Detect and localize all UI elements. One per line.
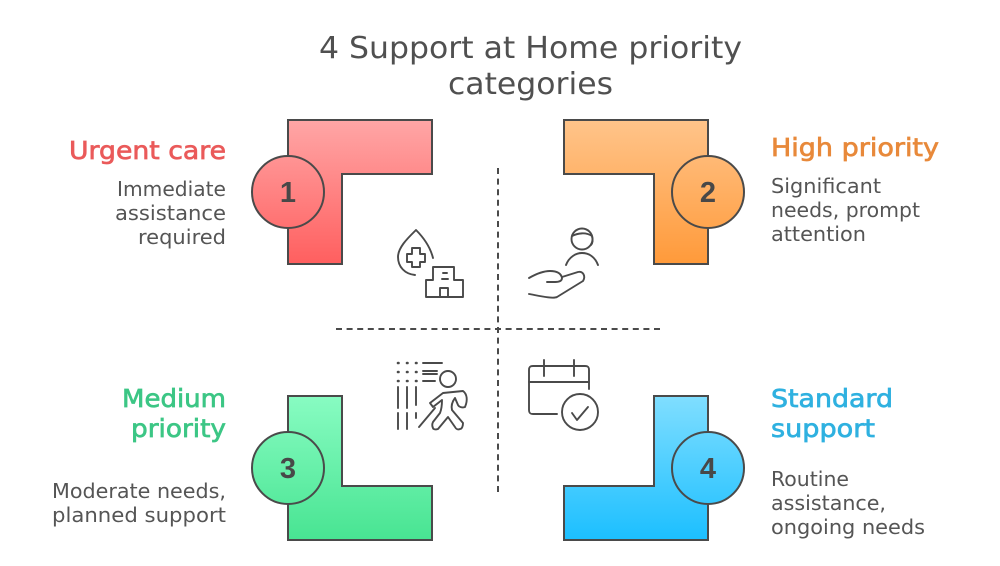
heading: medium priority: Medium bbox=[122, 384, 226, 413]
text: urgent care description: Immediate bbox=[117, 177, 226, 201]
badge 4 bbox=[672, 432, 744, 504]
icon: person walking with cane and braille dots bbox=[398, 363, 467, 429]
badge 4: 4 bbox=[700, 453, 716, 485]
heading: urgent care: Urgent care bbox=[69, 136, 226, 165]
badge 3: 3 bbox=[280, 453, 296, 485]
text: medium priority description bbox=[52, 479, 226, 527]
badge 2 bbox=[672, 156, 744, 228]
heading: high priority: High priority bbox=[771, 133, 939, 162]
panel: high priority shape bbox=[564, 120, 744, 264]
text: urgent care description: required bbox=[138, 225, 226, 249]
text: medium priority description: Moderate needs, bbox=[52, 479, 226, 503]
heading: medium priority: priority bbox=[131, 414, 226, 443]
text: standard support description: Routine bbox=[771, 467, 849, 491]
title bbox=[319, 31, 742, 102]
heading: standard support bbox=[771, 384, 893, 443]
heading: standard support: Standard bbox=[771, 384, 893, 413]
heading: standard support: support bbox=[771, 414, 875, 443]
title: 4 Support at Home priority bbox=[319, 31, 742, 66]
heading: medium priority bbox=[122, 384, 226, 443]
text: standard support description bbox=[771, 467, 925, 539]
badge 1 bbox=[252, 156, 324, 228]
badge 2: 2 bbox=[700, 177, 716, 209]
text: medium priority description: planned support bbox=[52, 503, 226, 527]
icon: blood drop and hospital bbox=[398, 230, 463, 297]
badge 3 bbox=[252, 432, 324, 504]
text: high priority description: Significant bbox=[771, 174, 881, 198]
panel: urgent care shape bbox=[252, 120, 432, 264]
panel: standard support shape bbox=[564, 396, 744, 540]
text: standard support description: assistance, bbox=[771, 491, 886, 515]
text: urgent care description bbox=[115, 177, 226, 249]
dashed vertical axis bbox=[497, 168, 499, 492]
text: standard support description: ongoing needs bbox=[771, 515, 925, 539]
title: categories bbox=[448, 67, 613, 102]
text: high priority description: attention bbox=[771, 222, 866, 246]
icon: calendar with check bbox=[529, 360, 598, 430]
text: high priority description bbox=[771, 174, 920, 246]
text: high priority description: needs, prompt bbox=[771, 198, 920, 222]
badge 1: 1 bbox=[280, 177, 296, 209]
panel: medium priority shape bbox=[252, 396, 432, 540]
text: urgent care description: assistance bbox=[115, 201, 226, 225]
dashed horizontal axis bbox=[336, 328, 660, 330]
icon: hand holding person bbox=[529, 228, 598, 298]
